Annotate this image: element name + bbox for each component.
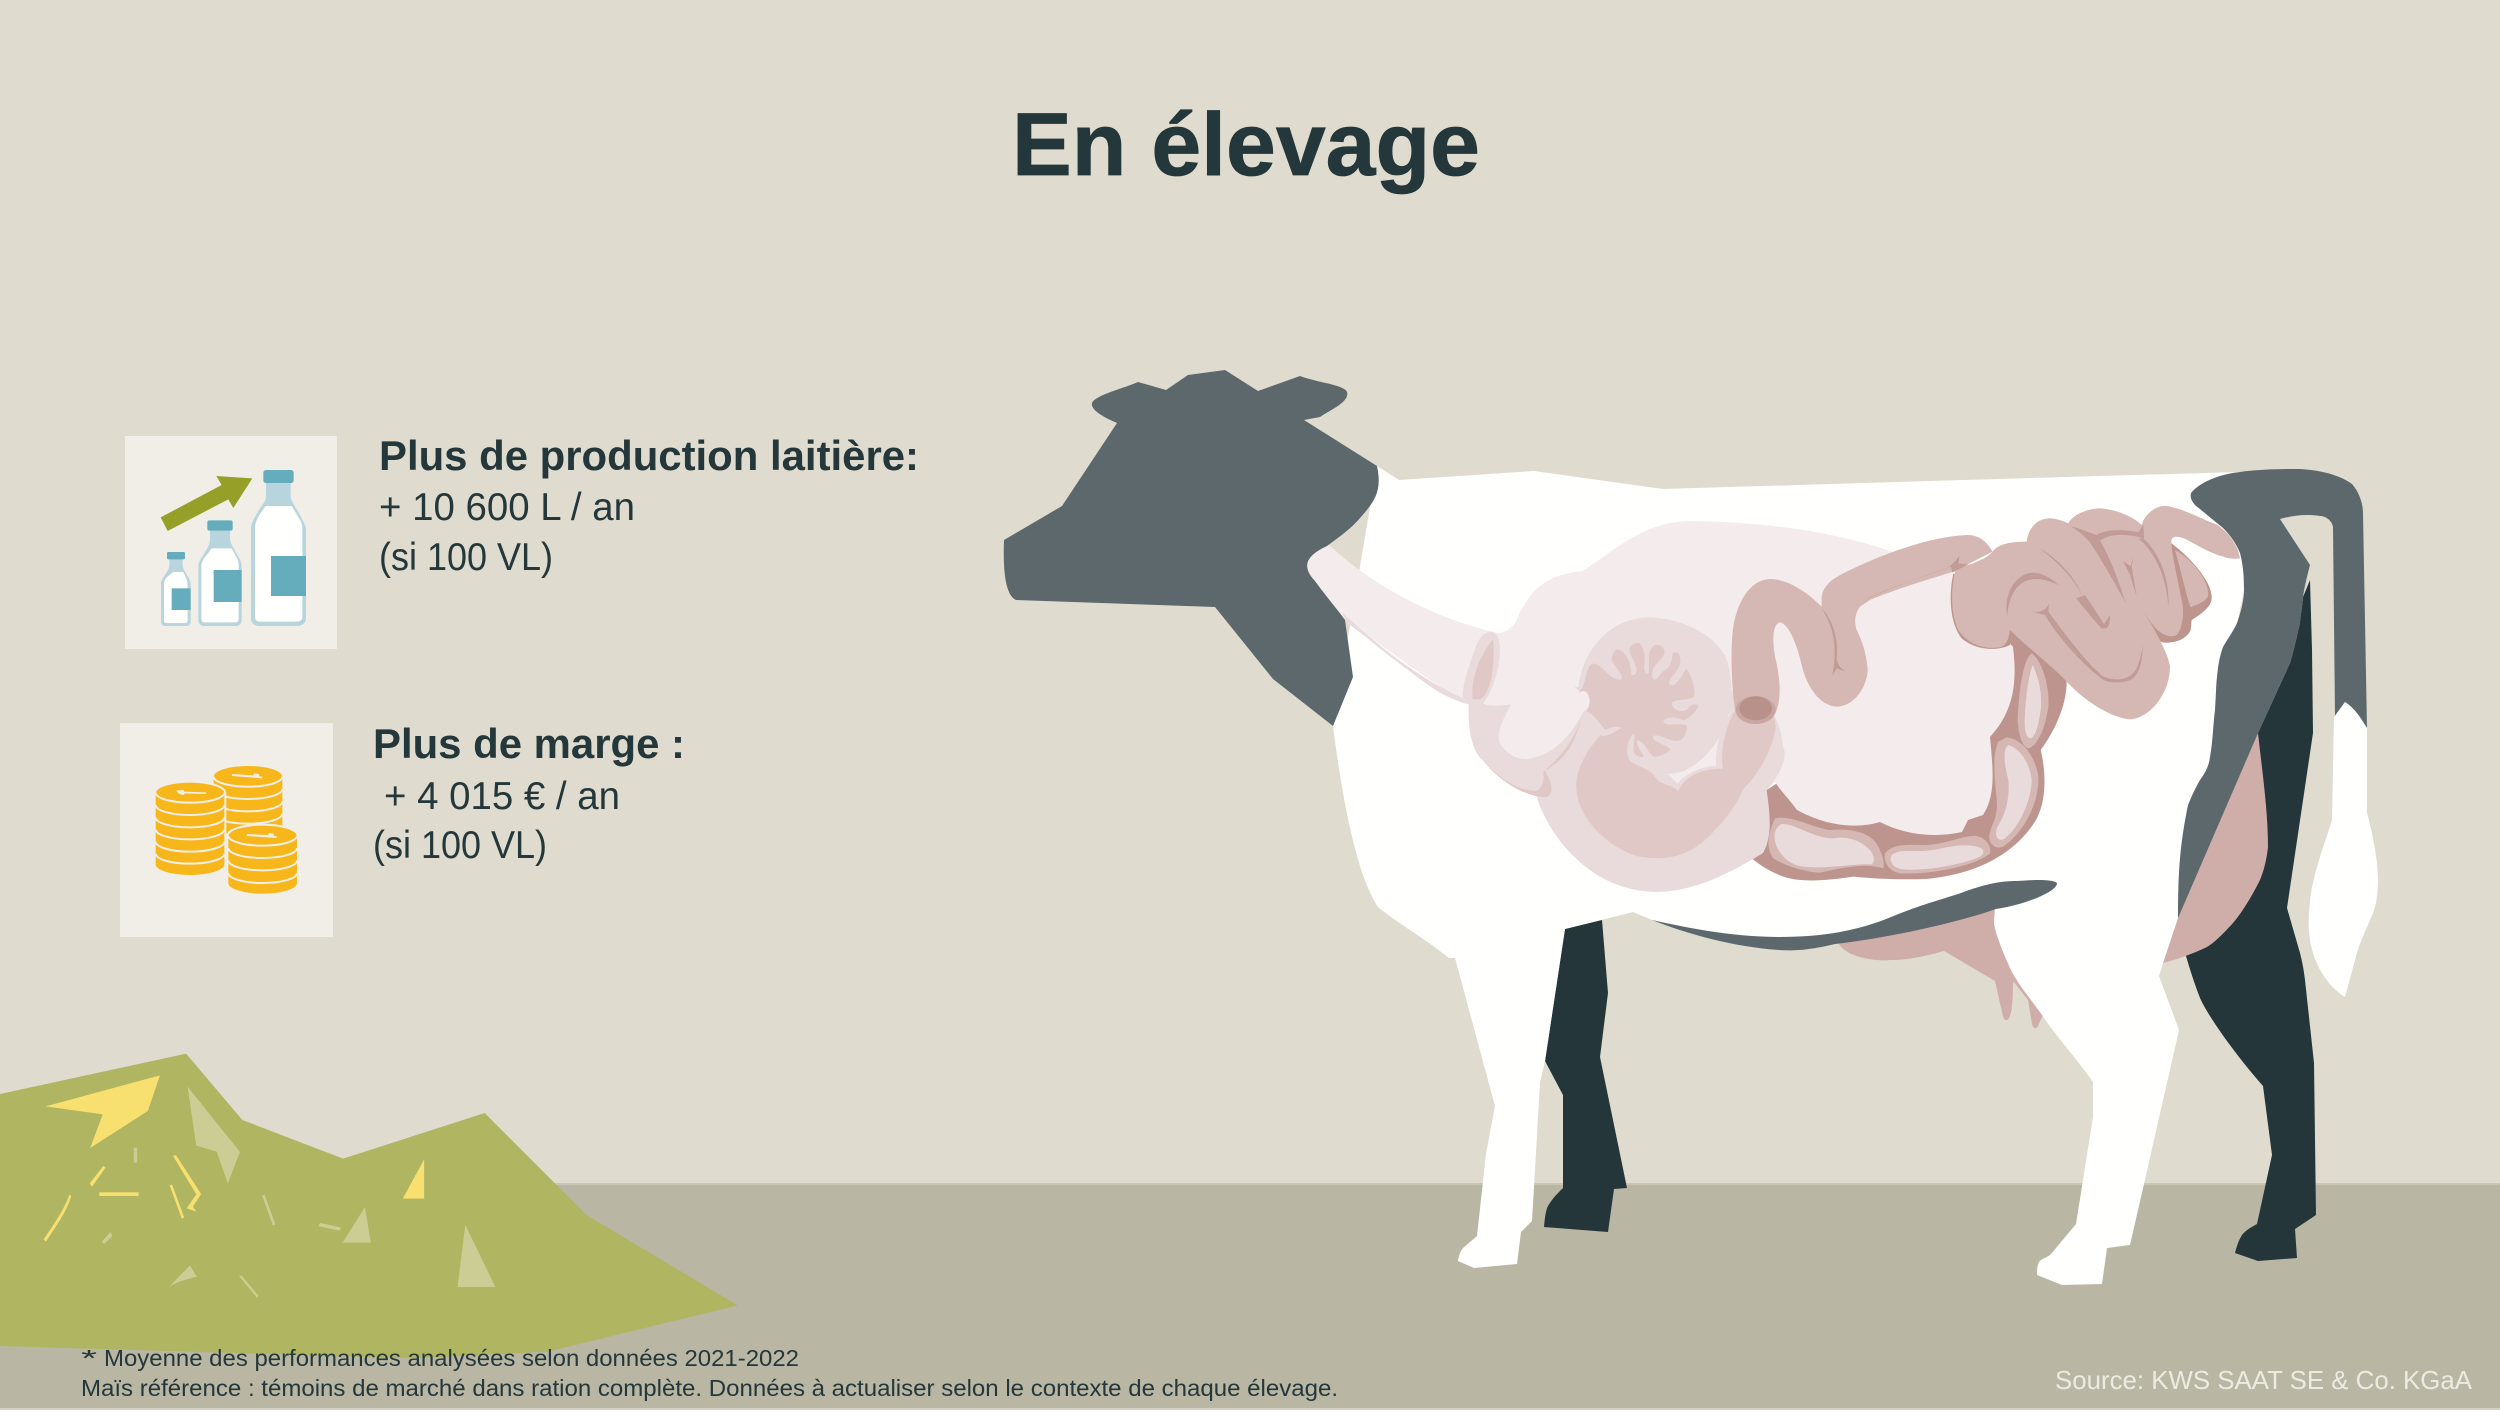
footnote: [81, 1345, 1338, 1401]
value: litres: + 10 600 L / an: [379, 486, 635, 529]
title: En élevage: [1012, 94, 1480, 194]
note: 100 cows: (si 100 VL): [373, 824, 547, 867]
footnote: Maïs référence : témoins de marché dans ration complète. Données à actualiser selon le contexte de chaque élevage.: [81, 1375, 1338, 1401]
silage pile: [0, 1054, 738, 1358]
stomach chambers: [1343, 613, 1785, 892]
large intestine wall: [1752, 623, 2067, 881]
heading: margin: Plus de marge :: [373, 720, 685, 767]
belly shadow: [1652, 880, 2057, 950]
value: euros: + 4 015 € / an: [384, 775, 620, 818]
rear pink panel: [2163, 733, 2268, 963]
footnote: Moyenne des performances analysées selon données 2021-2022: [104, 1345, 799, 1371]
heading: production: Plus de production laitière:: [379, 432, 919, 479]
far legs: [1544, 580, 2316, 1261]
white body: [1333, 466, 2244, 1285]
rumen and oesophagus: [1290, 521, 2015, 850]
cow illustration: [1004, 370, 2378, 1285]
ground floor: [0, 1184, 2500, 1410]
rump and tail patch: [2178, 469, 2367, 918]
tail tuft: [2309, 702, 2378, 997]
note: 100 cows: (si 100 VL): [379, 536, 553, 579]
panel: milk production: [125, 432, 919, 649]
head patch: [1004, 370, 1379, 726]
udder: [1839, 900, 2045, 1028]
digestive system: [1290, 506, 2240, 892]
sacs of the large intestine: [1769, 653, 2049, 874]
intestine fold shading: [1822, 525, 2169, 682]
source credit: Source: KWS SAAT SE & Co. KGaA: [2055, 1365, 2473, 1395]
panel: margin: [120, 720, 685, 937]
icon: milk bottles with rising arrow: [125, 436, 337, 649]
small intestine: [1732, 506, 2240, 724]
footnote: *: [81, 1345, 97, 1371]
icon: coin stacks: [120, 723, 333, 937]
